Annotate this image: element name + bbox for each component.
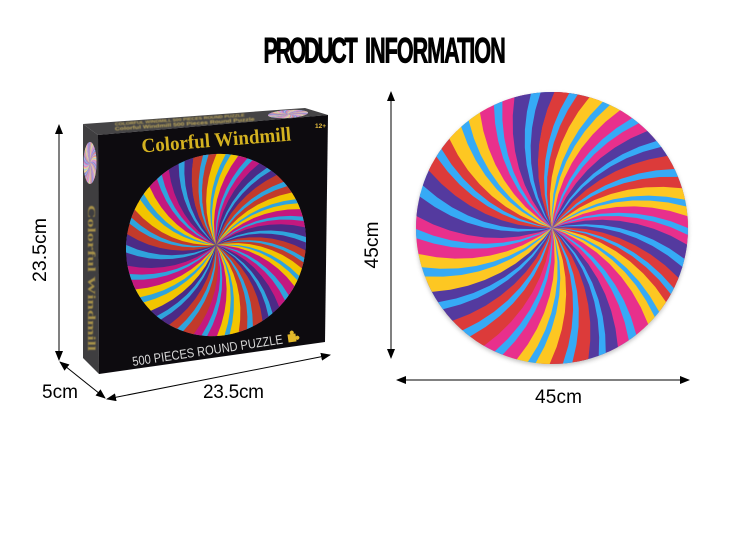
- age badge: 12+: [315, 123, 326, 130]
- puzzle shadow: [416, 94, 688, 366]
- box top face: [83, 108, 328, 135]
- label: box width: 23.5cm: [203, 382, 264, 403]
- box side text: Colorful Windmill: [85, 205, 97, 351]
- box side artwork: [83, 140, 97, 186]
- label: puzzle height: 45cm: [362, 222, 383, 268]
- product box: [83, 108, 336, 374]
- icon: puzzle piece: [287, 330, 300, 343]
- box front face: [98, 115, 328, 374]
- box front puzzle swirl: [96, 121, 336, 369]
- box left side face: [83, 124, 99, 374]
- arrow: puzzle width: [397, 379, 689, 381]
- title: PRODUCT: [264, 32, 358, 71]
- title: INFORMATION: [365, 32, 506, 71]
- round puzzle: [405, 81, 699, 375]
- box caption: 500 PIECES ROUND PUZZLE: [131, 332, 284, 369]
- box name: Colorful Windmill: [141, 123, 292, 157]
- label: box height: 23.5cm: [29, 218, 51, 282]
- arrow: box height: [58, 125, 60, 360]
- arrow: puzzle height: [390, 92, 392, 358]
- box top face blurred text: COLORFUL WINDMILL 500 PIECES ROUND PUZZLE: [115, 112, 245, 126]
- title: [264, 32, 506, 71]
- arrow: box depth: [60, 362, 105, 398]
- arrow: box width: [107, 355, 330, 399]
- label: puzzle width: 45cm: [535, 387, 582, 408]
- box top face blurred text: [115, 112, 255, 132]
- box top face blurred text: Colorful Windmill 500 Pieces Round Puzzle: [115, 117, 255, 132]
- label: box depth: 5cm: [42, 382, 78, 403]
- box top face artwork: [266, 108, 310, 120]
